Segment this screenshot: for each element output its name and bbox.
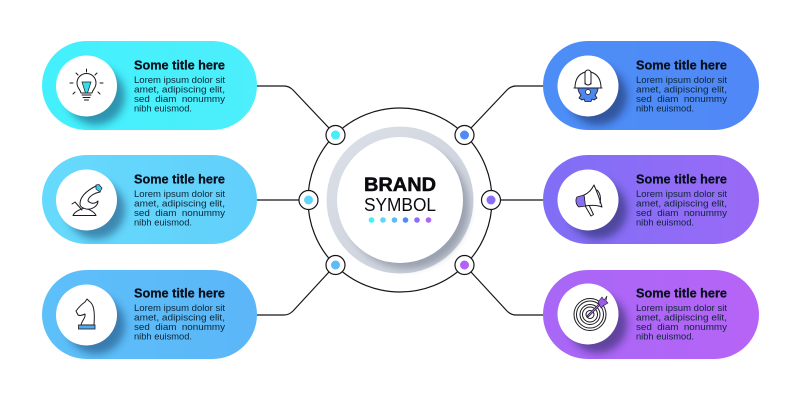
body text: sed diam nonummy — [134, 93, 225, 104]
body text: nibh euismod. — [636, 330, 694, 342]
body text: sed diam nonummy — [134, 321, 225, 332]
body text: Lorem ipsum dolor sit — [134, 188, 225, 199]
panel: top left — [42, 41, 257, 130]
body text — [134, 188, 225, 228]
outer ring — [308, 108, 492, 292]
icon circle shadow — [67, 181, 125, 239]
body text: amet, adipiscing elit, — [134, 312, 225, 322]
body text: sed diam nonummy — [636, 207, 727, 218]
body text: nibh euismod. — [134, 216, 192, 228]
panel: bottom right — [543, 270, 759, 359]
icon: light bulb — [56, 56, 117, 116]
body text: amet, adipiscing elit, — [636, 198, 727, 208]
panel: middle left — [42, 155, 257, 244]
panel: top right — [543, 41, 759, 130]
icon: helmet and gear — [558, 56, 618, 116]
icon circle shadow — [67, 67, 125, 125]
body text: Lorem ipsum dolor sit — [134, 302, 225, 313]
body text: sed diam nonummy — [134, 207, 225, 218]
body text — [636, 302, 727, 342]
symbol word: SYMBOL — [364, 195, 436, 215]
icon: target with arrow — [558, 284, 618, 344]
central disc — [326, 126, 474, 274]
node: bottom right — [455, 256, 474, 274]
body text: nibh euismod. — [636, 102, 694, 114]
body text: Lorem ipsum dolor sit — [134, 74, 225, 85]
body text: nibh euismod. — [134, 330, 192, 342]
icon: microscope — [56, 170, 117, 230]
title: Some title here — [134, 286, 225, 300]
colour dots — [369, 217, 431, 223]
body text: amet, adipiscing elit, — [636, 84, 727, 94]
body text — [636, 188, 727, 228]
brand word: BRAND — [364, 174, 436, 196]
body text — [636, 74, 727, 114]
node: bottom left — [326, 256, 345, 274]
title: Some title here — [636, 286, 727, 300]
body text: Lorem ipsum dolor sit — [636, 74, 727, 85]
icon circle shadow — [67, 296, 125, 354]
icon circle shadow — [569, 181, 627, 239]
icon: megaphone — [558, 170, 618, 230]
title: Some title here — [134, 172, 225, 186]
title: Some title here — [134, 58, 225, 72]
title: Some title here — [636, 172, 727, 186]
node: middle right — [482, 190, 500, 210]
body text: Lorem ipsum dolor sit — [636, 188, 727, 199]
connector lines — [257, 86, 543, 315]
node: middle left — [299, 190, 318, 210]
body text: sed diam nonummy — [636, 321, 727, 332]
panel: bottom left — [42, 270, 257, 359]
body text: amet, adipiscing elit, — [134, 198, 225, 208]
body text: Lorem ipsum dolor sit — [636, 302, 727, 313]
body text: nibh euismod. — [636, 216, 694, 228]
body text — [134, 74, 225, 114]
node: top left — [326, 126, 345, 144]
body text — [134, 302, 225, 342]
body text: sed diam nonummy — [636, 93, 727, 104]
body text: amet, adipiscing elit, — [134, 84, 225, 94]
body text: nibh euismod. — [134, 102, 192, 114]
title: Some title here — [636, 58, 727, 72]
icon circle shadow — [569, 67, 627, 125]
body text: amet, adipiscing elit, — [636, 312, 727, 322]
node: top right — [455, 126, 474, 144]
panel: middle right — [543, 155, 759, 244]
icon: chess knight — [56, 284, 117, 346]
icon circle shadow — [569, 295, 627, 353]
